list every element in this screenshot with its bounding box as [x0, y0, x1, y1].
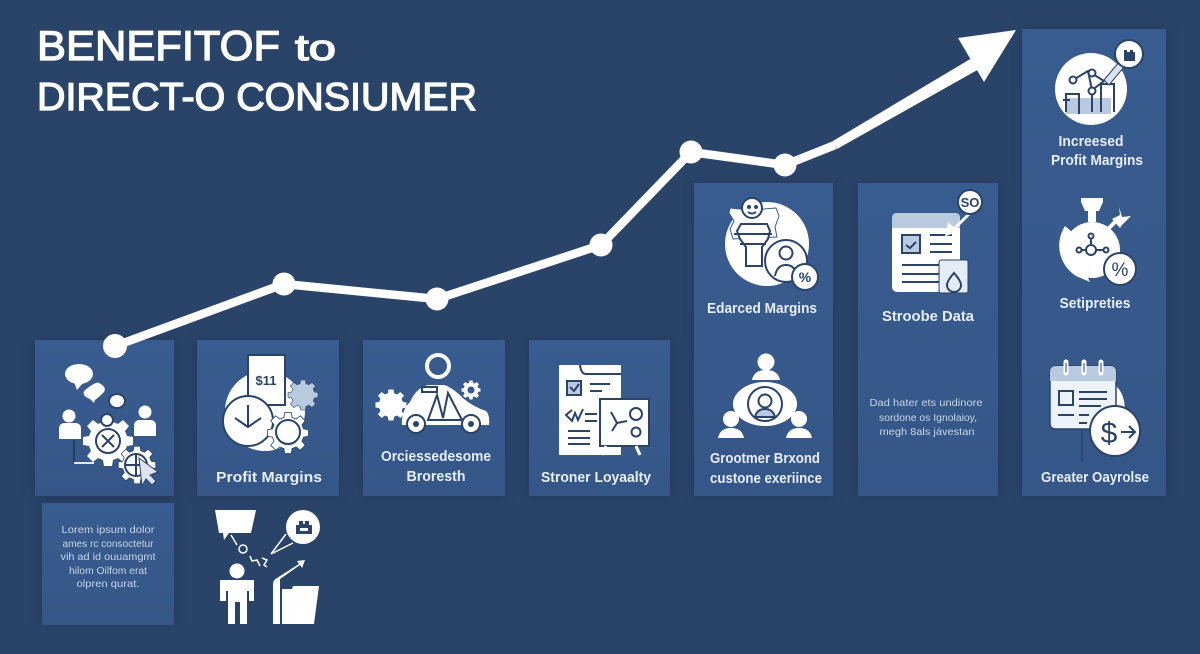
panel: lorem text — [42, 503, 174, 625]
icon: browser report with badge — [892, 190, 982, 293]
icon: profit chart circle — [1055, 40, 1143, 125]
label — [1051, 134, 1143, 169]
icon: calendar with dollar — [1050, 362, 1140, 462]
label: Increesed — [1058, 134, 1124, 150]
description text: sordone os Ignolaioy, — [879, 412, 977, 424]
panel: lorem text: olpren qurat. — [76, 578, 140, 590]
label: Profit Margins — [216, 470, 322, 486]
panel: car / brand growth — [363, 340, 505, 496]
icon: browser report with badge: SO — [961, 195, 979, 210]
panel: lorem text: Lorem ipsum dolor — [62, 524, 155, 536]
icon: smiling figure with percent — [725, 198, 818, 290]
icon: stopwatch with dart and percent — [1059, 198, 1136, 285]
panel: lorem text: ames rc consoctetur — [62, 538, 154, 550]
panel: increased profit margins — [1022, 29, 1166, 496]
panel: margins and brand — [694, 183, 833, 496]
label: Profit Margins — [1051, 153, 1143, 169]
panel: stronger loyalty — [529, 340, 670, 496]
panel: stakeholders gears — [35, 340, 174, 496]
label: Greater Oayrolse — [1041, 470, 1149, 486]
label: Stroobe Data — [882, 309, 975, 325]
panel: margins and brand: custone exeriince — [710, 471, 822, 487]
title: DIRECT-O CONSIUMER — [37, 76, 477, 119]
growth arrow line — [103, 30, 1016, 358]
icon: clock, invoice, bulb and gears — [223, 355, 318, 454]
label: Grootmer Brxond — [710, 451, 820, 467]
title: BENEFITOF — [37, 22, 280, 69]
icon: person with speech bubble, badge and folder — [215, 510, 320, 624]
panel: profit margins — [197, 340, 339, 496]
description text: Dad hater ets undinore — [870, 397, 983, 409]
label: Orciessedesome — [381, 449, 491, 465]
icon: clock, invoice, bulb and gears: $11 — [256, 373, 276, 388]
label: Setipreties — [1060, 296, 1130, 312]
panel: stroobe data — [858, 183, 998, 496]
panel: lorem text: vih ad id ouuamgmt — [60, 551, 156, 563]
title — [37, 22, 477, 119]
description text: megh 8als jávestan — [880, 426, 975, 438]
icon: people with gears and chat bubbles — [59, 364, 158, 486]
icon: customer circle — [718, 354, 812, 438]
icon: documents and chart board — [559, 365, 649, 455]
label: Stroner Loyaalty — [541, 470, 651, 486]
icon: car with gears — [376, 355, 489, 433]
panel: lorem text: hilom Oilfom erat — [69, 565, 147, 577]
label: Edarced Margins — [707, 301, 817, 317]
panel: car / brand growth: Broresth — [406, 469, 466, 485]
icon: calendar with dollar: $ — [1101, 417, 1118, 450]
title: to — [295, 27, 336, 68]
icon: smiling figure with percent: % — [799, 269, 812, 285]
icon: stopwatch with dart and percent: % — [1112, 260, 1129, 281]
description text — [870, 397, 983, 438]
